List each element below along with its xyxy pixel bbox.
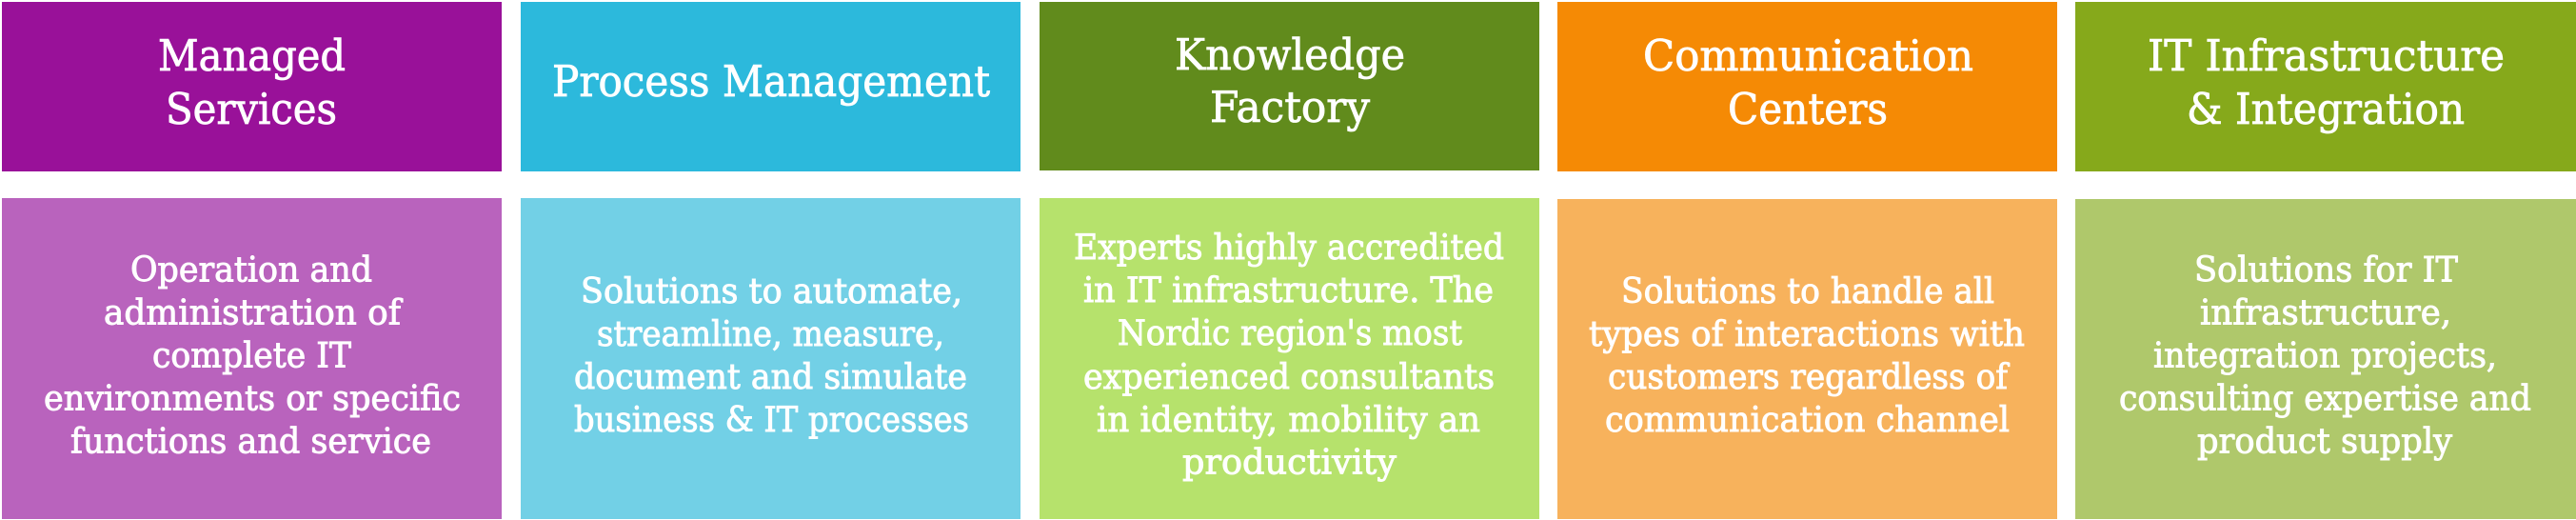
text: IT Infrastructure & Integration description [2119,251,2531,461]
heading: Knowledge Factory: Factory [1210,82,1371,132]
text: Communication Centers description [1589,272,2025,440]
text: Process Management description: document and simulate [574,358,967,397]
heading: Managed Services [158,30,346,134]
text: IT Infrastructure & Integration description: integration projects, [2153,337,2497,375]
panel: Communication Centers description [1557,199,2057,519]
text: Process Management description: Solutions to automate, [581,272,962,311]
text: IT Infrastructure & Integration description: infrastructure, [2200,293,2451,333]
text: Managed Services description: environments or specific [44,379,461,419]
text: Managed Services description [44,251,461,461]
text: Knowledge Factory description: Nordic region's most [1118,314,1463,353]
heading: Managed Services: Managed [158,30,346,81]
text: Managed Services description: complete IT [152,337,351,375]
text: Knowledge Factory description: in identity, mobility an [1097,401,1480,440]
heading: IT Infrastructure & Integration [2148,30,2505,134]
heading: IT Infrastructure & Integration: & Integration [2187,84,2465,134]
text: Communication Centers description: types of interactions with [1589,315,2025,354]
heading: Process Management: Process Management [552,56,990,107]
panel: IT Infrastructure & Integration heading [2075,2,2576,171]
heading: Knowledge Factory: Knowledge [1175,30,1405,80]
heading: Communication Centers [1643,30,1973,134]
heading: Knowledge Factory [1175,30,1405,132]
panel: Managed Services heading [2,2,502,171]
text: Managed Services description: administration of [104,293,404,333]
text: Process Management description: business & IT processes [574,401,969,440]
text: Knowledge Factory description: experienced consultants [1083,358,1495,397]
text: Communication Centers description: communication channel [1605,401,2010,440]
panel: Process Management description [521,198,1020,519]
text: Knowledge Factory description: in IT infrastructure. The [1083,271,1494,310]
panel: Knowledge Factory heading [1040,2,1539,170]
text: Process Management description [574,272,969,440]
heading: Managed Services: Services [166,84,337,134]
text: Knowledge Factory description [1074,229,1504,482]
text: Managed Services description: Operation and [130,251,372,290]
panel: IT Infrastructure & Integration description [2075,199,2576,519]
text: Managed Services description: functions and service [70,423,431,461]
heading: Communication Centers: Communication [1643,30,1973,81]
text: Communication Centers description: customers regardless of [1608,358,2011,397]
heading: Communication Centers: Centers [1728,84,1888,134]
text: Communication Centers description: Solutions to handle all [1621,272,1994,311]
text: IT Infrastructure & Integration description: consulting expertise and [2119,379,2531,419]
heading: IT Infrastructure & Integration: IT Infrastructure [2148,30,2505,81]
panel: Process Management heading [521,2,1020,171]
panel: Communication Centers heading [1557,2,2057,171]
text: Knowledge Factory description: Experts highly accredited [1074,229,1504,268]
text: IT Infrastructure & Integration description: product supply [2197,423,2453,461]
panel: Managed Services description [2,198,502,519]
text: IT Infrastructure & Integration description: Solutions for IT [2194,251,2458,290]
text: Knowledge Factory description: productivity [1182,444,1397,482]
text: Process Management description: streamline, measure, [597,315,944,354]
panel: Knowledge Factory description [1040,198,1539,519]
